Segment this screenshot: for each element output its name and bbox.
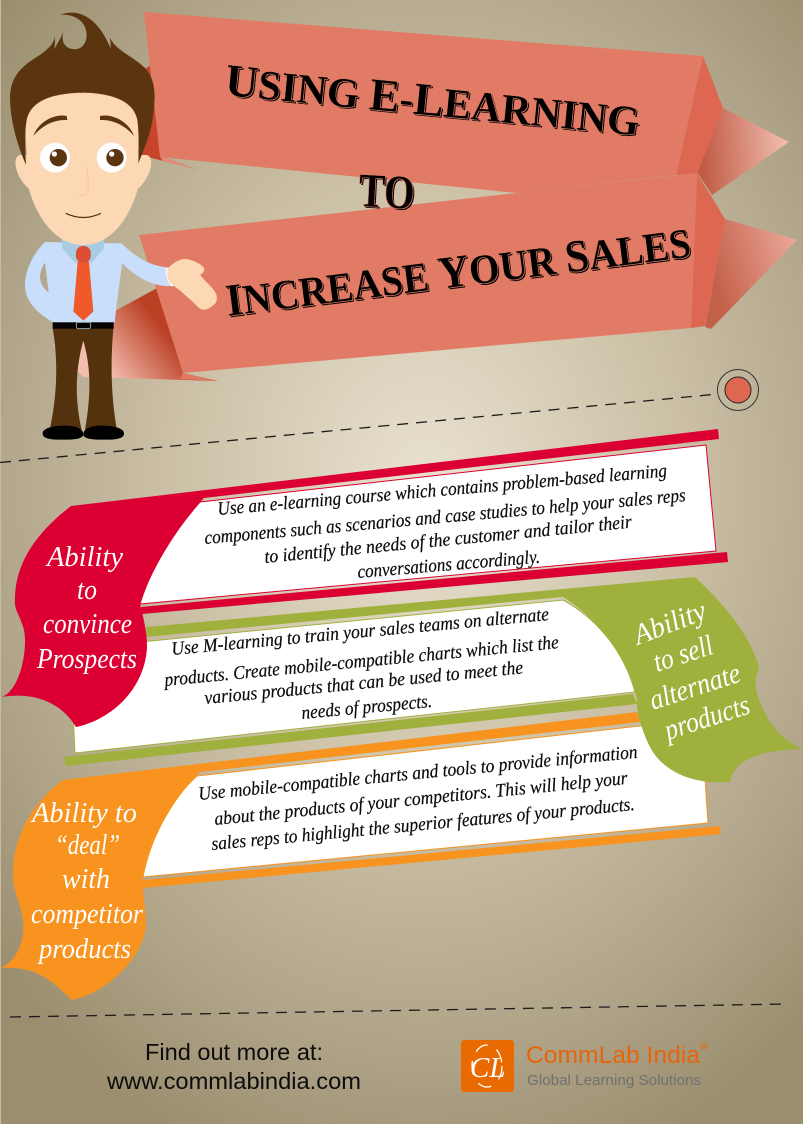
ribbon left tip bottom <box>180 373 218 381</box>
lower bar <box>64 694 637 766</box>
inner dot <box>725 377 751 403</box>
logo tagline: Global Learning Solutions <box>527 1072 701 1089</box>
title ribbon <box>53 12 797 381</box>
hair <box>10 13 155 165</box>
collar <box>62 238 104 263</box>
belt <box>53 322 114 329</box>
title line 2: TO <box>357 164 416 220</box>
panel body <box>70 600 635 753</box>
title line 3: INCREASE YOUR SALES <box>223 216 693 326</box>
dashed divider bottom <box>10 1004 788 1017</box>
ribbon right tail bottom <box>705 219 797 329</box>
footer call to action: Find out more at: <box>145 1039 323 1065</box>
ears <box>15 155 151 188</box>
title line 1: USING E-LEARNING <box>223 54 642 146</box>
head <box>25 93 138 245</box>
cuff <box>166 268 174 287</box>
lower bar <box>141 552 728 614</box>
right eyebrow <box>100 116 134 136</box>
panel text: sales reps to highlight the superior features of your products. <box>210 794 636 855</box>
badge label: with <box>62 863 110 895</box>
highlight <box>52 151 57 157</box>
hand <box>167 259 217 310</box>
badge label <box>627 595 754 747</box>
highlight <box>109 151 114 157</box>
panel text: Use M-learning to train your sales teams on alternate <box>171 604 550 660</box>
panel text: conversations accordingly. <box>357 547 541 583</box>
ribbon left tip top <box>160 156 195 169</box>
ribbon left tail bottom <box>53 288 218 381</box>
panel text <box>162 604 560 724</box>
panel text: Use mobile-compatible charts and tools to provide information <box>197 742 638 805</box>
character: businessman <box>10 13 217 440</box>
right eye <box>97 143 127 173</box>
badge label: to <box>77 574 97 606</box>
mouth <box>66 213 101 217</box>
ribbon top panel <box>144 12 703 193</box>
left eyebrow <box>33 116 67 136</box>
badge label <box>30 797 144 965</box>
target marker <box>718 370 758 410</box>
logo monogram: CL <box>470 1052 505 1084</box>
logo square <box>461 1040 514 1092</box>
panel text: products. Create mobile-compatible charts which list the <box>162 632 560 691</box>
ribbon bottom panel <box>139 173 697 373</box>
ribbon right tail top <box>697 108 789 195</box>
orange badge with upper bar <box>0 712 640 1000</box>
trousers <box>50 328 117 430</box>
panel: convince prospects (red) <box>2 429 728 727</box>
tie <box>73 246 93 321</box>
ribbon fold bottom <box>691 173 725 328</box>
green badge with upper bar <box>146 577 803 782</box>
footer call to action: www.commlabindia.com <box>106 1068 361 1094</box>
ribbon fold top <box>676 56 723 175</box>
tie blade <box>73 262 93 321</box>
badge label: to sell <box>649 629 717 679</box>
panel text: components such as scenarios and case studies to help your sales reps <box>204 485 687 549</box>
badge label: Ability to <box>30 797 137 829</box>
title <box>223 54 693 326</box>
panel text: various products that can be used to meet the <box>203 657 524 709</box>
shirt <box>25 242 172 322</box>
logo: CommLab India <box>461 1040 708 1092</box>
footer call to action <box>106 1039 361 1094</box>
panel text: Use an e-learning course which contains problem-based learning <box>217 461 668 520</box>
panel text <box>204 461 687 583</box>
badge label <box>36 541 137 675</box>
outer ring <box>718 370 758 410</box>
pupil <box>106 149 124 166</box>
red badge with upper bar <box>2 429 719 727</box>
dashed divider top <box>0 394 718 462</box>
panel: alternate products (green) <box>64 577 803 782</box>
logo wordmark: CommLab India <box>526 1042 701 1069</box>
ribbon left fold top <box>140 65 195 169</box>
panel text <box>197 742 638 855</box>
badge label: Ability <box>45 541 123 573</box>
badge label: Prospects <box>36 643 137 675</box>
pupil <box>50 149 67 166</box>
eye white <box>97 143 127 173</box>
badge label: “deal” <box>55 829 120 861</box>
panel body <box>143 719 708 877</box>
tie knot <box>76 246 91 263</box>
belt buckle <box>76 322 91 329</box>
badge label: products <box>659 689 754 747</box>
left eye <box>40 143 70 173</box>
badge label: convince <box>43 608 132 640</box>
logo ellipse <box>472 1045 502 1087</box>
panel text: needs of prospects. <box>301 691 433 724</box>
badge label: alternate <box>645 657 745 717</box>
shoes <box>43 426 124 440</box>
badge label: Ability <box>627 595 711 652</box>
badge label: competitor <box>31 898 144 930</box>
lower bar <box>143 826 721 888</box>
eye white <box>40 143 70 173</box>
panel: competitor products (orange) <box>0 712 721 1000</box>
logo registered mark: ® <box>700 1041 708 1053</box>
panel text: to identify the needs of the customer and tailor their <box>263 512 633 568</box>
panel body <box>140 445 716 604</box>
panel text: about the products of your competitors. This will help your <box>213 768 629 830</box>
nose <box>79 166 88 195</box>
badge label: products <box>37 933 131 965</box>
